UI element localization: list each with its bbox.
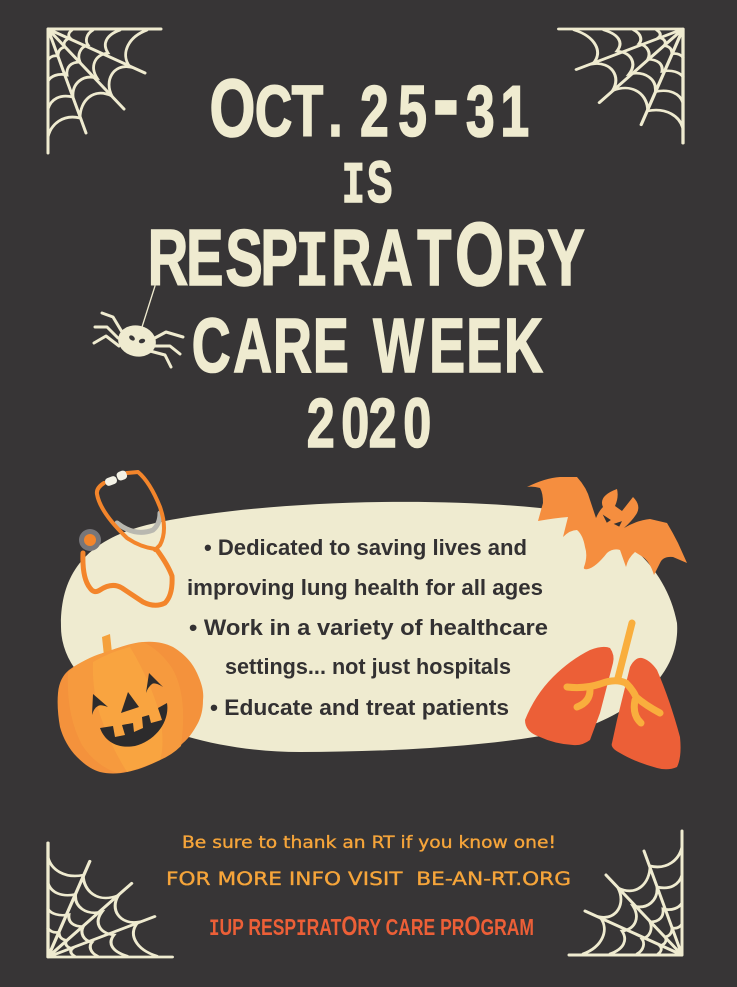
title line: year: 2020 bbox=[307, 384, 431, 462]
bullet text: line 2: improving lung health for all ages bbox=[187, 575, 543, 600]
icon: lungs bbox=[525, 623, 681, 769]
bullet text: line 5: • Educate and treat patients bbox=[210, 695, 509, 720]
bullet text: line 3: • Work in a variety of healthcare bbox=[189, 615, 548, 640]
icon: stethoscope bbox=[79, 470, 172, 605]
footer text: program: IUP RESPIRATORY CARE PROGRAM bbox=[209, 911, 534, 942]
bullet text: line 4: settings... not just hospitals bbox=[225, 654, 511, 679]
icon: spider bbox=[94, 286, 183, 367]
bullet list bbox=[187, 535, 548, 720]
title line: respiratory: RESPIRATORY bbox=[148, 205, 585, 309]
footer bbox=[166, 833, 571, 942]
icon: spider web top right bbox=[559, 29, 683, 143]
bullet text: line 1: • Dedicated to saving lives and bbox=[204, 535, 527, 560]
footer text: thanks: Be sure to thank an RT if you know one! bbox=[182, 833, 556, 853]
panel: cream blob bbox=[61, 502, 677, 752]
icon: spider web bottom left bbox=[48, 843, 172, 957]
footer text: more info: FOR MORE INFO VISIT BE-AN-RT.ORG bbox=[166, 869, 571, 890]
icon: pumpkin bbox=[58, 634, 203, 774]
title bbox=[148, 37, 585, 462]
title line: is: IS bbox=[342, 151, 392, 220]
title line: care week: CARE WEEK bbox=[192, 304, 543, 389]
icon: spider web top left bbox=[48, 29, 161, 153]
icon: bat bbox=[527, 477, 687, 575]
icon: spider web bottom right bbox=[569, 831, 682, 955]
title line: date: OCT. 25-31 bbox=[210, 37, 529, 160]
